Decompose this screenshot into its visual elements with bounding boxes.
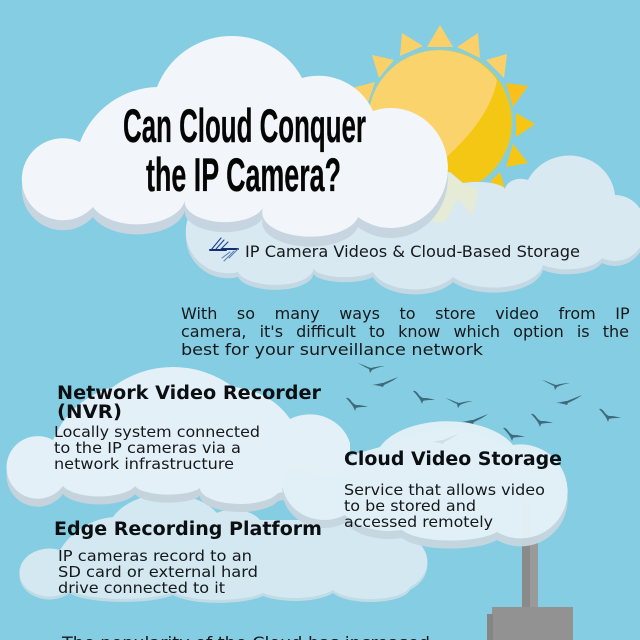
cloud storage text bbox=[344, 481, 545, 531]
cloud storage heading: Cloud Video Storage bbox=[344, 449, 562, 470]
subtitle: IP Camera Videos & Cloud-Based Storage bbox=[245, 242, 580, 261]
tower bbox=[487, 503, 573, 640]
nvr heading bbox=[57, 383, 322, 423]
cloud storage text: accessed remotely bbox=[344, 513, 493, 531]
birds over cloud bbox=[432, 428, 525, 444]
sun rays bbox=[352, 25, 535, 189]
title: the IP Camera? bbox=[146, 148, 341, 201]
intro text: camera, it's difficult to know which option is the bbox=[181, 322, 629, 341]
edge recording heading: Edge Recording Platform bbox=[54, 519, 322, 540]
cloud storage text: Service that allows video bbox=[344, 481, 545, 499]
main cloud bbox=[22, 36, 448, 247]
nvr text: Locally system connected bbox=[54, 423, 260, 441]
title bbox=[123, 99, 366, 201]
nvr text bbox=[54, 423, 260, 473]
edge recording text: IP cameras record to an bbox=[58, 547, 252, 565]
nvr heading: Network Video Recorder bbox=[57, 383, 322, 404]
birds bbox=[346, 363, 621, 427]
edge recording text: SD card or external hard bbox=[58, 563, 258, 581]
edge recording text: drive connected to it bbox=[58, 579, 225, 597]
intro text: best for your surveillance network bbox=[181, 340, 484, 359]
intro text: With so many ways to store video from IP bbox=[181, 304, 630, 323]
icon: logo bbox=[210, 238, 238, 261]
sun bbox=[352, 25, 535, 195]
cloud storage text: to be stored and bbox=[344, 497, 476, 515]
nvr text: to the IP cameras via a bbox=[54, 439, 241, 457]
title: Can Cloud Conquer bbox=[123, 99, 366, 152]
cloud: edge recording platform bbox=[19, 494, 427, 603]
nvr text: network infrastructure bbox=[54, 455, 234, 473]
cloud: network video recorder bbox=[7, 367, 350, 512]
background cloud bbox=[186, 155, 640, 294]
cloud: cloud video storage bbox=[282, 421, 568, 549]
nvr heading: (NVR) bbox=[57, 402, 122, 423]
edge recording text bbox=[58, 547, 258, 597]
intro text bbox=[181, 304, 630, 359]
